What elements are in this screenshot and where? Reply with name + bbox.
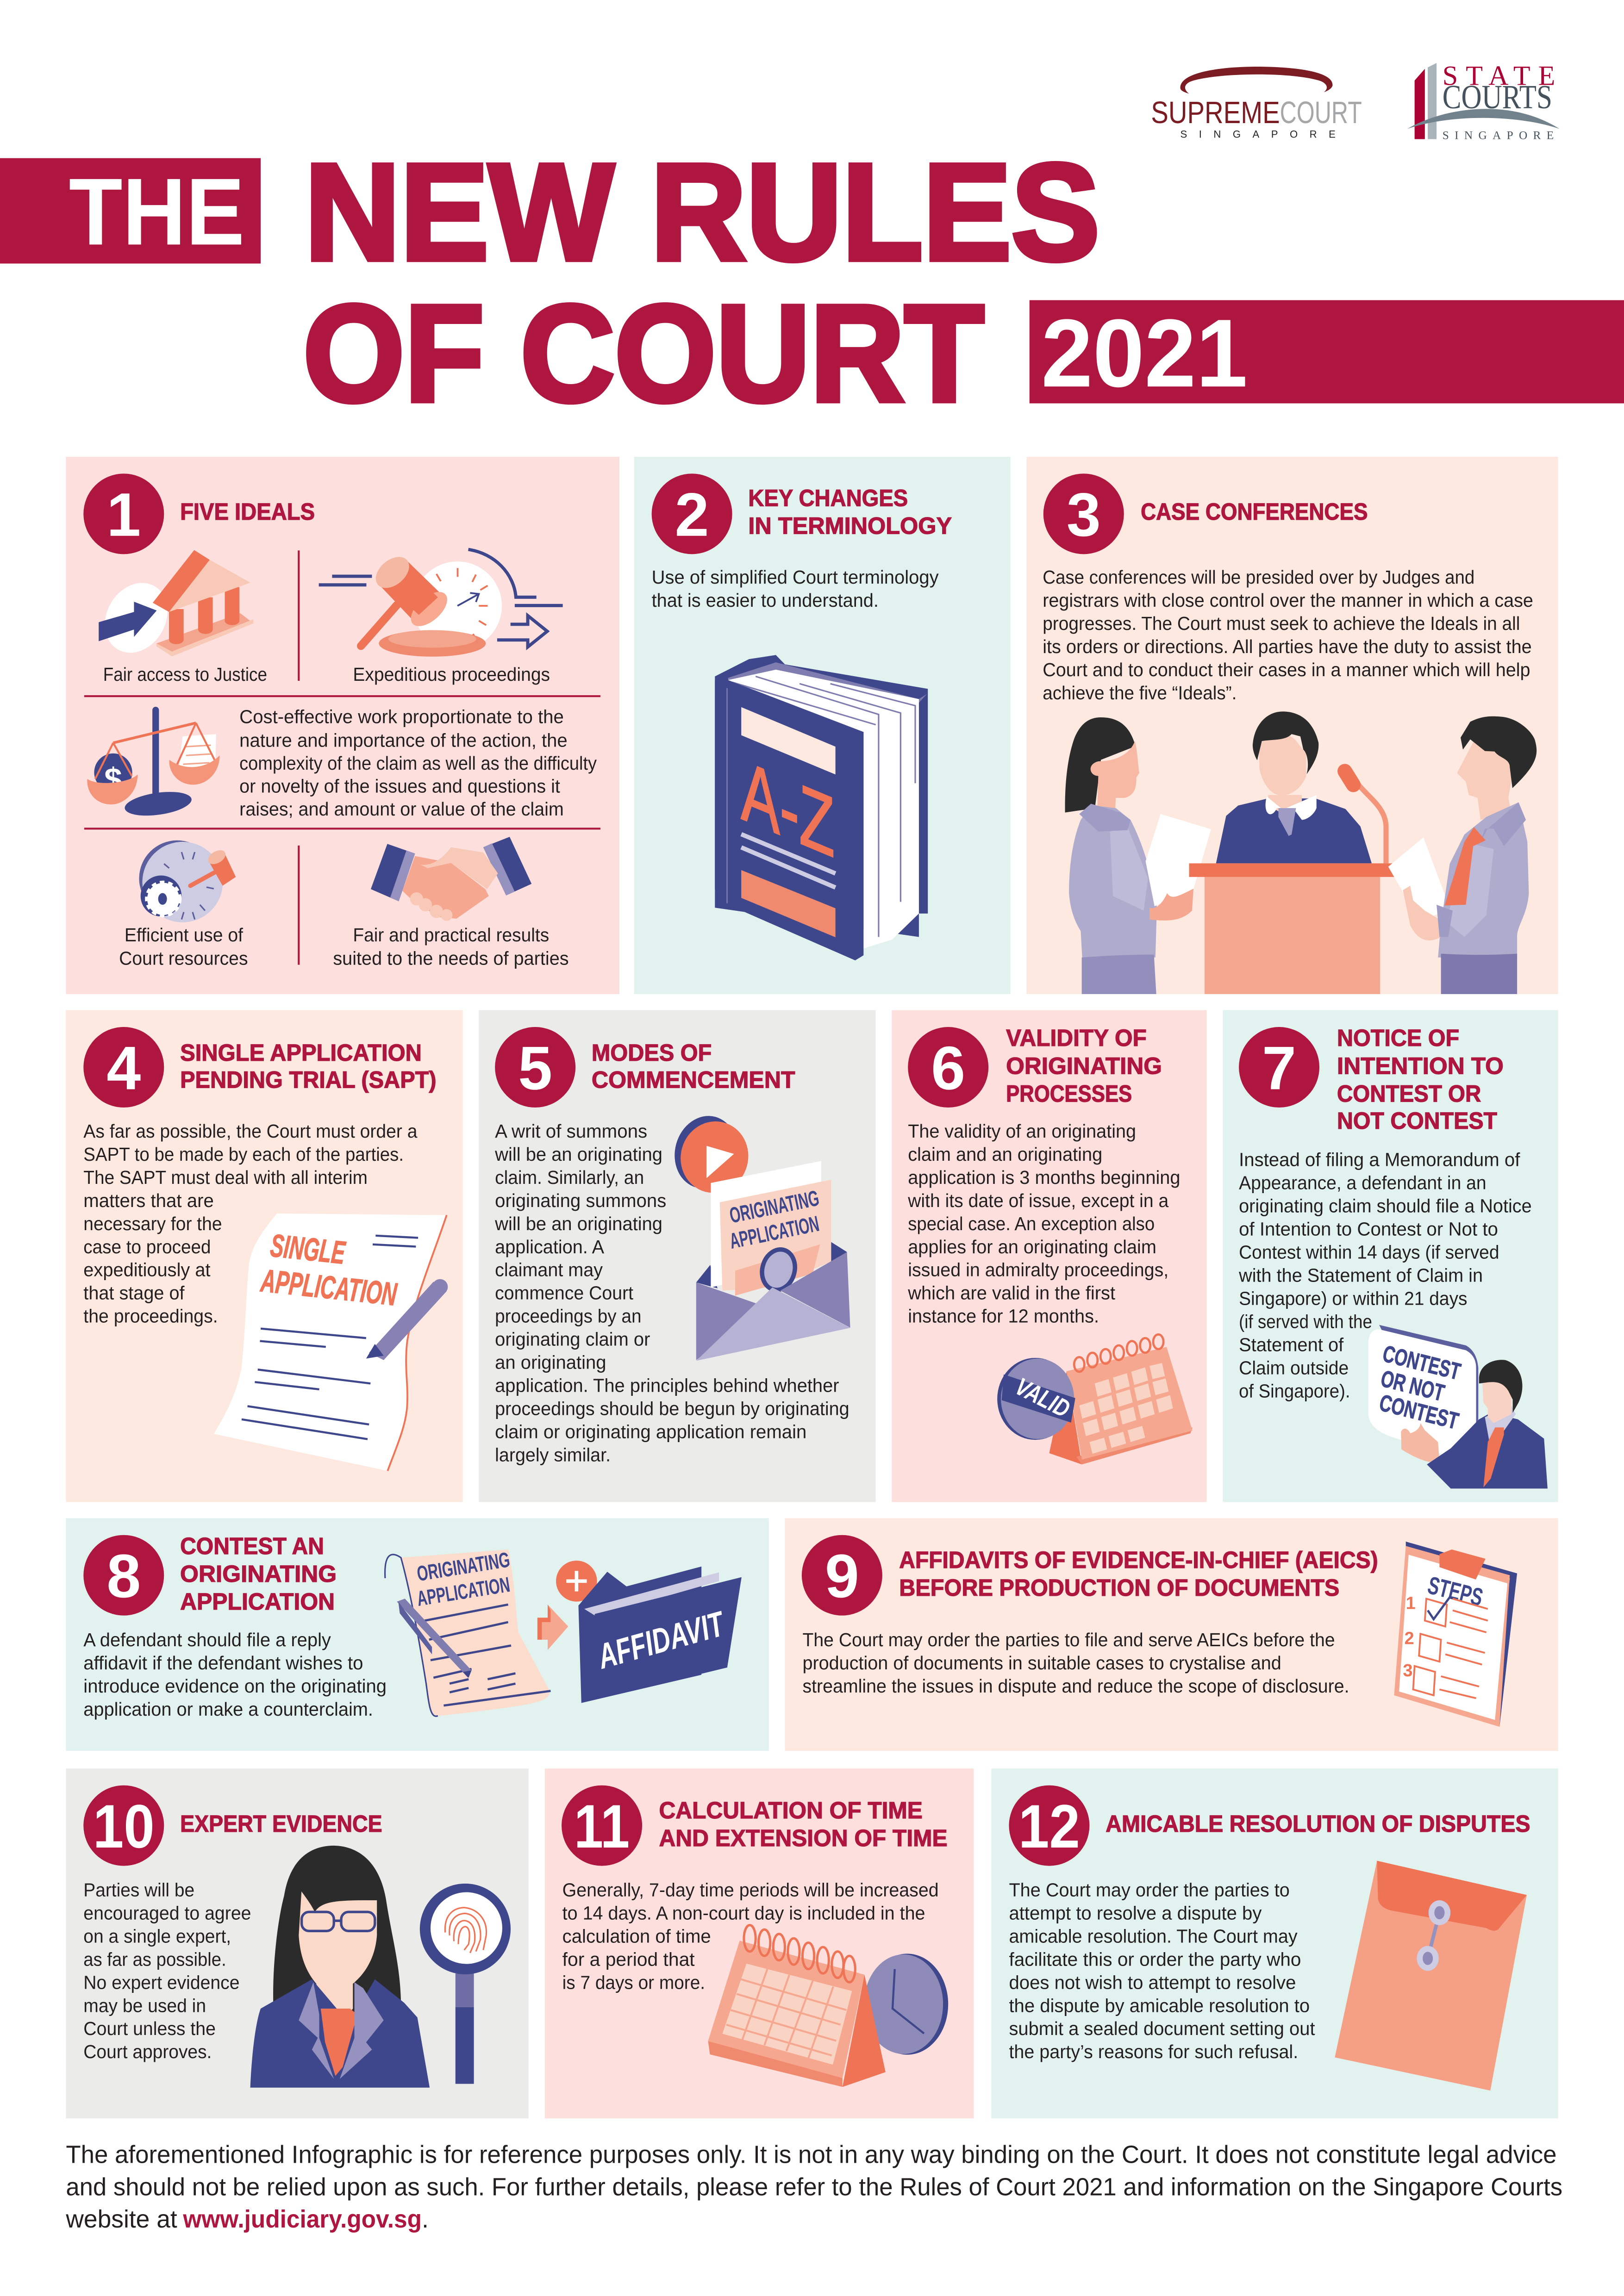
number badge 8: 8 [106,1542,141,1611]
text: Claim outside [1239,1357,1349,1378]
text: that is easier to understand. [652,590,879,611]
panel 4: single application pending trial [66,1010,463,1502]
heading: PENDING TRIAL (SAPT) [180,1066,437,1093]
panel 10: expert evidence [66,1768,529,2118]
text: cost-effective work [239,706,597,820]
number badge 5 [495,1027,575,1108]
panel 9: affidavits of evidence-in-chief [785,1518,1558,1751]
text: may be used in [83,1995,206,2016]
text: application or make a counterclaim. [83,1699,373,1720]
number badge 11 [562,1786,642,1866]
heading: NOT CONTEST [1337,1108,1497,1134]
icon: play button and application envelope: ORIGINATING [727,1186,821,1228]
title: NEW RULES [305,136,1100,289]
heading: CONTEST OR [1337,1080,1481,1107]
label: Fair and practical results [353,924,549,946]
text: submit a sealed document setting out [1009,2018,1315,2039]
text: calculation of time [562,1925,711,1947]
number badge 9: 9 [825,1542,859,1611]
text: is 7 days or more. [562,1972,705,1993]
text: claim and an originating [908,1144,1102,1165]
text: Parties will be [83,1879,194,1900]
text: the proceedings. [83,1306,218,1327]
text [83,1879,251,2062]
heading [592,1039,795,1093]
text [83,1629,387,1720]
icon: originating application scroll: APPLICATION [415,1572,512,1611]
icon: play button and application envelope [667,1109,850,1361]
icon: steps clipboard [1394,1542,1517,1727]
text: as far as possible. [83,1948,226,1970]
logo: State Courts: STATE [1443,61,1555,92]
title: 2021 [1041,299,1248,407]
logo: Supreme Court: SINGAPORE [1181,128,1336,140]
icon: valid stamp and calendar: VALID [1011,1373,1074,1423]
heading [748,485,952,539]
heading: AMICABLE RESOLUTION OF DISPUTES [1106,1811,1530,1837]
logo: Supreme Court: SUPREME [1151,96,1280,130]
icon: A-Z book: A-Z [741,741,835,876]
text: cost-effective work: complexity of the claim as well as the difficulty [239,753,597,774]
text: As far as possible, the Court must order a [83,1120,418,1142]
icon: magnifier with fingerprint [420,1884,511,2084]
footer disclaimer [65,2141,1562,2233]
logo: State Courts: SINGAPORE [1443,129,1554,142]
footer disclaimer: www.judiciary.gov.sg [182,2205,422,2233]
label: Efficient use of [125,924,244,946]
text [83,1120,418,1327]
icon: handshake [371,837,531,921]
heading [899,1547,1378,1601]
label [119,924,248,969]
text: that stage of [83,1282,185,1304]
icon: clock and calendar [708,1925,948,2087]
icon: steps clipboard: STEPS [1425,1571,1486,1612]
number badge 9 [802,1535,882,1616]
text: cost-effective work: nature and importance of the action, the [239,729,568,751]
logo: Supreme Court [1151,67,1362,140]
text: Singapore) or within 21 days [1239,1288,1468,1309]
text: amicable resolution. The Court may [1009,1925,1298,1947]
icon: single application paper and pencil [214,1213,448,1471]
text [1043,566,1533,703]
heading: BEFORE PRODUCTION OF DOCUMENTS [899,1574,1339,1601]
text: proceedings by an [495,1306,641,1327]
text: to 14 days. A non-court day is included in the [562,1902,925,1923]
text: production of documents in suitable cases to crystalise and [802,1652,1281,1674]
icon: courthouse with arrow [93,550,253,664]
icon: valid stamp and calendar [997,1334,1193,1464]
heading: AND EXTENSION OF TIME [659,1825,948,1851]
icon: gavel and clock [319,549,563,657]
number badge 6: 6 [931,1034,965,1102]
text: The Court may order the parties to file and serve AEICs before the [802,1629,1335,1650]
heading: KEY CHANGES [748,485,908,511]
text: largely similar. [495,1444,611,1466]
text: The SAPT must deal with all interim [83,1167,368,1188]
text: which are valid in the first [907,1282,1115,1304]
text: necessary for the [83,1213,222,1234]
text: does not wish to attempt to resolve [1009,1972,1296,1993]
panel 7: notice of intention to contest [1223,1010,1558,1502]
panel 1: five ideals [66,457,619,994]
heading: SINGLE APPLICATION [180,1039,422,1066]
number badge 2 [652,473,732,554]
title: OF COURT [303,277,984,430]
icon: plus and arrow [537,1561,597,1650]
heading [180,1533,337,1615]
illustration: expert woman [250,1846,430,2088]
text: application is 3 months beginning [908,1167,1181,1188]
text: of Intention to Contest or Not to [1239,1219,1498,1240]
heading: CONTEST AN [180,1533,324,1559]
text: originating summons [495,1190,666,1211]
text: application. A [495,1236,604,1257]
illustration: judge at podium with microphone [1189,711,1396,994]
text: with its date of issue, except in a [907,1190,1169,1211]
text: application. The principles behind whether [495,1375,839,1396]
heading [1006,1025,1162,1107]
text [494,1120,849,1466]
text: with the Statement of Claim in [1238,1264,1483,1286]
illustration: man with paper and tie [1388,716,1537,994]
text: cost-effective work: raises; and amount or value of the claim [239,798,564,820]
heading: ORIGINATING [1006,1052,1162,1079]
text: Appearance, a defendant in an [1239,1172,1487,1194]
text: claim or originating application remain [495,1421,806,1443]
icon: clock, gear and gavel [139,840,236,922]
text [802,1629,1349,1697]
number badge 7: 7 [1262,1034,1296,1102]
text: affidavit if the defendant wishes to [83,1652,363,1674]
icon: scales: $ [104,761,122,797]
panel 3: case conferences [1026,457,1558,994]
icon: sealed envelope [1335,1861,1527,2091]
icon: steps clipboard: 2 [1405,1629,1414,1648]
text: commence Court [495,1282,633,1304]
text: facilitate this or order the party who [1009,1948,1301,1970]
title [0,136,1624,430]
text: introduce evidence on the originating [83,1675,387,1697]
number badge 1 [83,473,164,554]
number badge 4: 4 [106,1034,141,1102]
number badge 6 [908,1027,988,1108]
icon: A-Z book [715,655,928,960]
panel 12: amicable resolution of disputes [991,1768,1558,2118]
text: matters that are [83,1190,214,1211]
logo: State Courts: COURTS [1443,78,1552,116]
text: Court unless the [83,2018,216,2039]
heading: NOTICE OF [1337,1025,1459,1051]
text: registrars with close control over the manner in which a case [1043,590,1533,611]
label: Expeditious proceedings [353,664,550,685]
text [562,1879,939,1993]
text: the party’s reasons for such refusal. [1009,2041,1298,2062]
text [652,566,939,611]
text: Contest within 14 days (if served [1239,1241,1499,1263]
title: THE [69,158,244,265]
heading: MODES OF [592,1039,712,1066]
logo: Supreme Court: COURT [1280,96,1362,130]
heading: CALCULATION OF TIME [659,1797,923,1823]
number badge 11: 11 [574,1792,630,1861]
heading: APPLICATION [180,1588,335,1615]
number badge 3: 3 [1067,481,1101,549]
heading: five ideals: FIVE IDEALS [180,498,315,525]
text: its orders or directions. All parties have the duty to assist the [1043,636,1532,657]
footer disclaimer: The aforementioned Infographic is for reference purposes only. It is not in any way binding on the Court. It does not constitute legal advice [66,2141,1556,2169]
text: SAPT to be made by each of the parties. [83,1144,404,1165]
heading: INTENTION TO [1337,1052,1504,1079]
text: A writ of summons [495,1120,647,1142]
heading: VALIDITY OF [1006,1025,1147,1051]
text: streamline the issues in dispute and reduce the scope of disclosure. [802,1675,1349,1697]
text [1009,1879,1315,2062]
icon: single application paper and pencil: SINGLE [269,1227,348,1271]
number badge 7 [1239,1027,1319,1108]
heading: IN TERMINOLOGY [748,512,952,539]
text: The validity of an originating [908,1120,1136,1142]
text: originating claim or [495,1329,650,1350]
number badge 8 [83,1535,164,1616]
text: special case. An exception also [908,1213,1155,1234]
text: achieve the five “Ideals”. [1043,682,1237,703]
text: Statement of [1239,1334,1344,1355]
logo: State Courts [1407,61,1560,142]
text [1238,1149,1532,1401]
number badge 10: 10 [93,1792,155,1861]
text: Generally, 7-day time periods will be increased [562,1879,939,1900]
panel 2: key changes in terminology [634,457,1011,994]
text: (if served with the [1239,1311,1372,1332]
icon: play button and application envelope: APPLICATION [727,1212,821,1254]
label [333,924,569,969]
panel 5: modes of commencement [479,1010,876,1502]
illustration: woman with paper [1065,717,1211,994]
footer disclaimer: and should not be relied upon as such. For further details, please refer to the Rules of Court 2021 and information on the Singapore Courts [66,2173,1562,2201]
text: expeditiously at [83,1259,211,1281]
text: applies for an originating claim [908,1236,1156,1257]
icon: affidavit folder: AFFIDAVIT [593,1604,730,1677]
icon: man holding contest sign: OR NOT [1378,1365,1447,1406]
text: for a period that [562,1948,695,1970]
icon: scales [87,710,219,819]
text: The Court may order the parties to [1009,1879,1290,1900]
text: case to proceed [83,1236,211,1257]
heading [1337,1025,1504,1134]
number badge 5: 5 [518,1034,552,1102]
text: A defendant should file a reply [83,1629,331,1650]
text: claimant may [495,1259,603,1281]
text: proceedings should be begun by originating [495,1398,849,1419]
label: suited to the needs of parties [333,948,569,969]
text [907,1120,1181,1327]
text: Case conferences will be presided over by Judges and [1043,566,1474,588]
text: the dispute by amicable resolution to [1009,1995,1310,2016]
number badge 12: 12 [1018,1792,1080,1861]
icon: man holding contest sign [1368,1325,1548,1488]
text: instance for 12 months. [908,1306,1099,1327]
panel 8: contest an originating application [66,1518,769,1751]
text: attempt to resolve a dispute by [1009,1902,1262,1923]
heading: EXPERT EVIDENCE [180,1811,382,1837]
text: of Singapore). [1239,1380,1350,1401]
text: on a single expert, [83,1925,231,1947]
number badge 2: 2 [675,481,709,549]
text: cost-effective work: Cost-effective work proportionate to the [239,706,564,728]
text: Court approves. [83,2041,212,2062]
icon: affidavit folder [578,1567,742,1703]
text: Instead of filing a Memorandum of [1239,1149,1520,1170]
label: Fair access to Justice [103,664,267,685]
icon: single application paper and pencil: APPLICATION [259,1262,399,1313]
heading: CASE CONFERENCES [1141,498,1368,525]
panel 6: validity of originating processes [892,1010,1206,1502]
heading: AFFIDAVITS OF EVIDENCE-IN-CHIEF (AEICS) [899,1547,1378,1573]
footer disclaimer: . [422,2205,429,2233]
icon: originating application scroll: ORIGINATING [415,1547,512,1586]
text: will be an originating [494,1213,662,1234]
icon: man holding contest sign: CONTEST [1377,1389,1462,1434]
heading: COMMENCEMENT [592,1066,795,1093]
text: progresses. The Court must seek to achieve the Ideals in all [1043,613,1520,634]
number badge 1: 1 [106,481,141,549]
label: Court resources [119,948,248,969]
text: cost-effective work: or novelty of the issues and questions it [239,776,560,797]
text: an originating [495,1352,606,1373]
text: No expert evidence [83,1972,240,1993]
icon: originating application scroll [385,1547,550,1716]
number badge 4 [83,1027,164,1108]
icon: steps clipboard: 3 [1403,1661,1412,1680]
text: Court and to conduct their cases in a manner which will help [1043,659,1530,680]
footer disclaimer: website at [65,2205,177,2233]
text: Use of simplified Court terminology [652,566,939,588]
icon: steps clipboard: 1 [1406,1593,1416,1613]
heading [659,1797,948,1851]
heading [180,1039,437,1093]
text: originating claim should file a Notice [1239,1195,1532,1217]
text: will be an originating [494,1144,662,1165]
text: encouraged to agree [83,1902,251,1923]
heading: PROCESSES [1006,1080,1132,1107]
text: issued in admiralty proceedings, [908,1259,1168,1281]
heading: ORIGINATING [180,1561,337,1587]
panel 11: calculation of time [545,1768,974,2118]
text: claim. Similarly, an [495,1167,644,1188]
number badge 3 [1043,473,1124,554]
icon: man holding contest sign: CONTEST [1380,1340,1463,1385]
